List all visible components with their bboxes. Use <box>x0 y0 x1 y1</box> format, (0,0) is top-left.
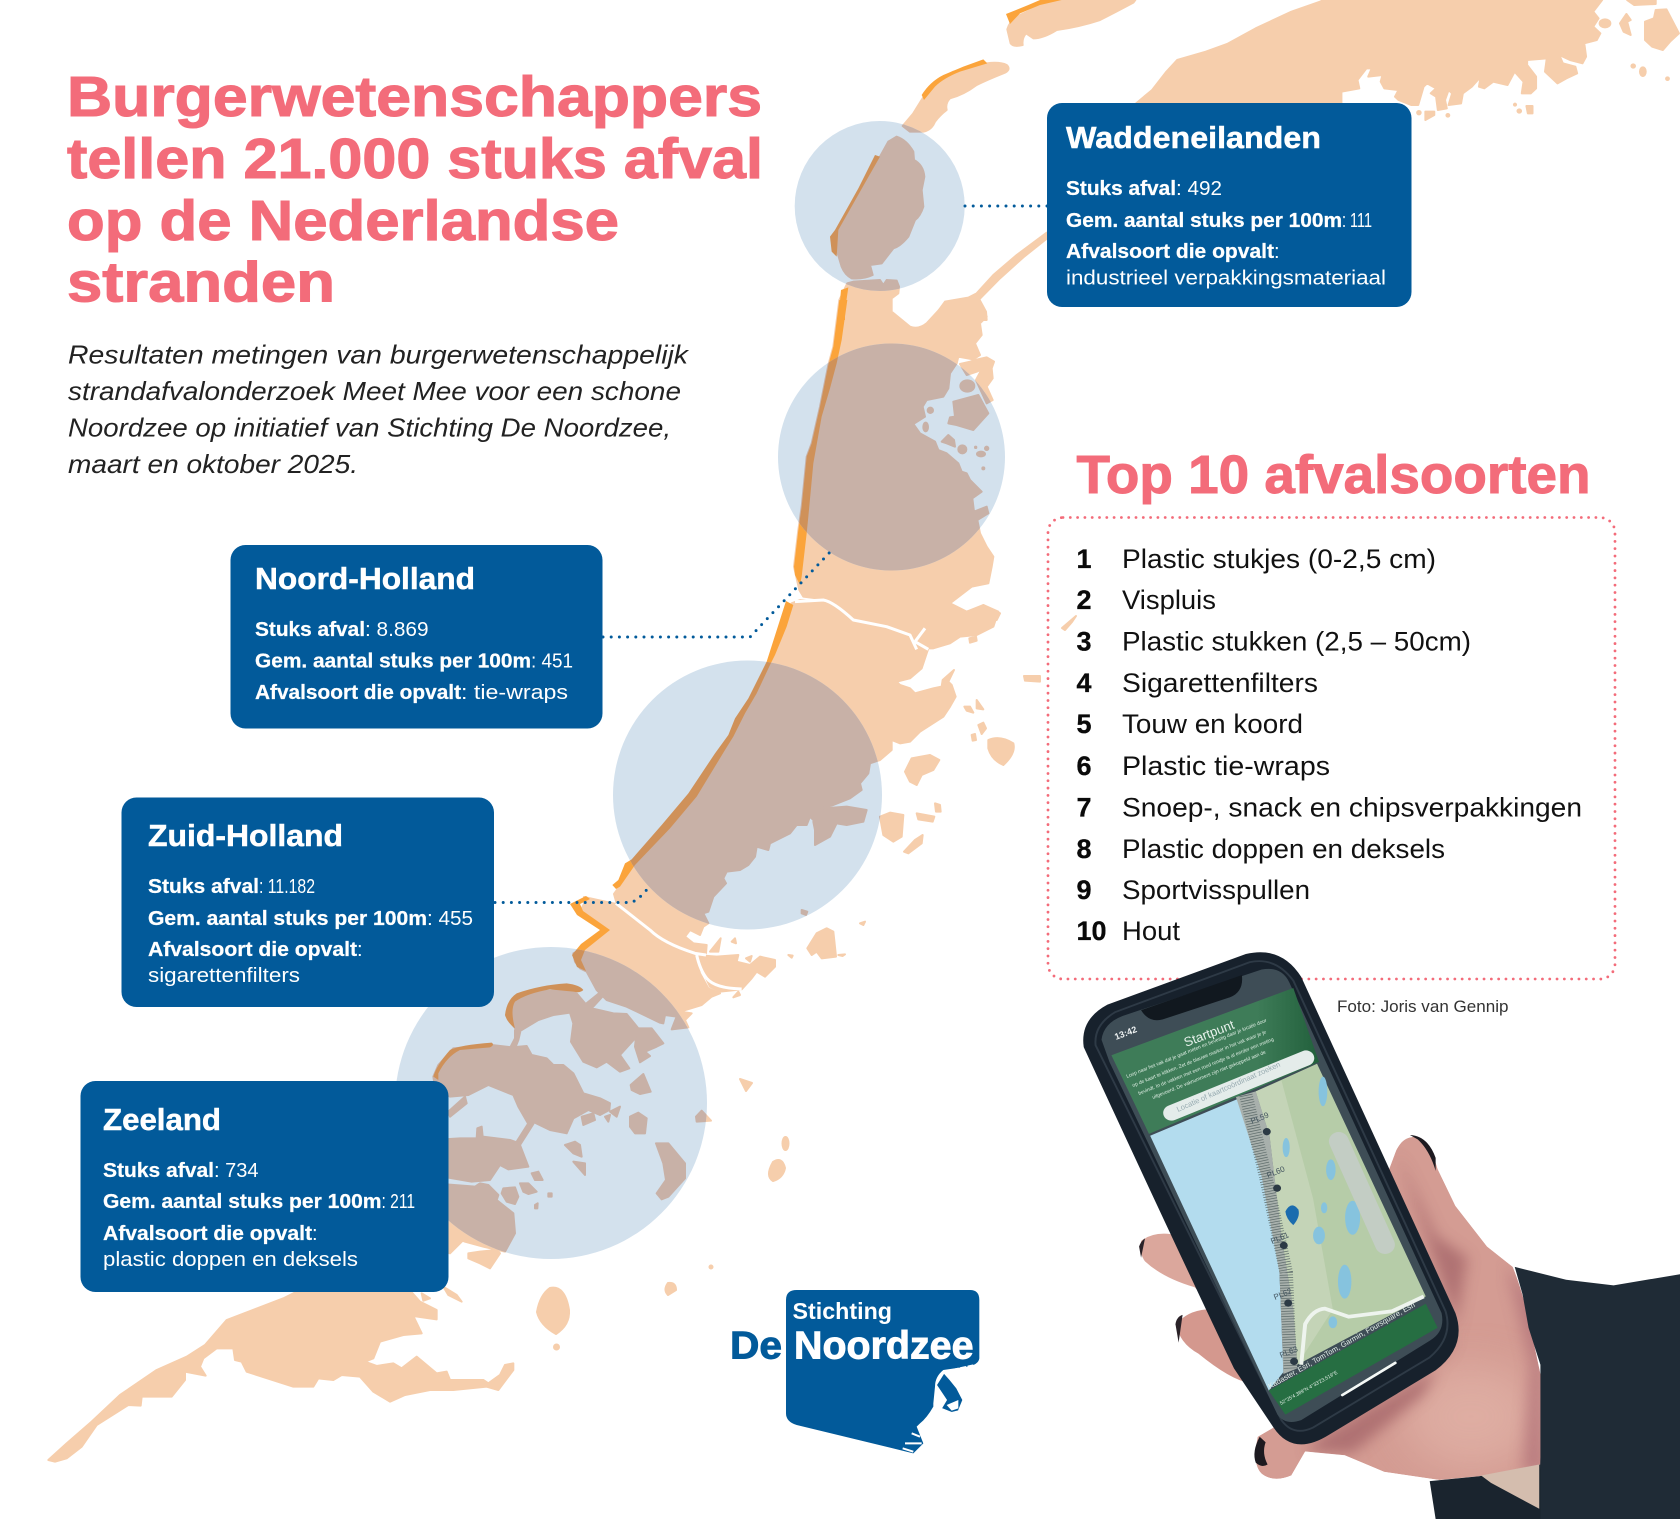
cuff <box>1481 1464 1539 1509</box>
panel: top 10 list: 2 <box>1076 585 1092 615</box>
panel: Zuid-Holland: : <box>357 939 363 961</box>
panel: Waddeneilanden: : 492 <box>1176 178 1222 200</box>
title: stranden <box>67 250 335 314</box>
photo: hand holding phone with app <box>1083 952 1680 1519</box>
title: op de Nederlandse <box>67 189 619 253</box>
dotted connector lines <box>495 206 1047 902</box>
panel: Zeeland <box>80 1081 448 1292</box>
panel: Zuid-Holland <box>122 798 494 1007</box>
panel: Waddeneilanden: Waddeneilanden <box>1066 121 1321 155</box>
beach hatch <box>1236 1091 1297 1374</box>
intro paragraph <box>68 340 690 479</box>
panel: top 10 list: Snoep-, snack en chipsverpakkingen <box>1122 792 1582 822</box>
panel: Waddeneilanden: : 111 <box>1342 210 1372 232</box>
panel: Zuid-Holland: : 455 <box>427 908 473 930</box>
intro paragraph: Noordzee op initiatief van Stichting De Noordzee, <box>68 412 671 442</box>
panel: Zeeland: : 211 <box>382 1191 415 1213</box>
panel: Zeeland: : <box>312 1223 318 1245</box>
intro paragraph: strandafvalonderzoek Meet Mee voor een schone <box>68 376 681 406</box>
map control pill <box>1339 1141 1385 1245</box>
finger 2 <box>1177 1309 1250 1383</box>
panel: top 10 list: 6 <box>1076 751 1092 781</box>
photo: hand holding phone with app: PL59 <box>1249 1110 1271 1126</box>
panel: top 10 list: 10 <box>1076 916 1107 946</box>
inner sleeve <box>1430 1464 1540 1519</box>
road <box>1301 1296 1424 1365</box>
logo shape <box>786 1290 979 1453</box>
photo: hand holding phone with app: uitgevoerd. De vaknummers zijn niet gekoppeld aan de <box>1152 1050 1267 1101</box>
screen <box>1102 969 1442 1422</box>
intro paragraph: Resultaten metingen van burgerwetenschappelijk <box>68 340 690 370</box>
finger 1 <box>1141 1234 1218 1309</box>
panel: top 10 list: 7 <box>1076 792 1092 822</box>
panel: Zeeland: : 734 <box>214 1160 258 1182</box>
beach hatch lines <box>1246 1095 1291 1370</box>
panel: Waddeneilanden: Afvalsoort die opvalt <box>1066 241 1274 263</box>
highlight circles for the four regions <box>395 121 1005 1259</box>
logo mini-map lake <box>947 1400 958 1411</box>
panel: Zeeland: Stuks afval <box>103 1160 214 1182</box>
panel: Zuid-Holland: Stuks afval <box>148 876 259 898</box>
panel: Zeeland: Zeeland <box>103 1103 221 1137</box>
panel: Noord-Holland: : 451 <box>531 650 573 672</box>
photo: hand holding phone with app: PL63 <box>1278 1344 1300 1360</box>
title: tellen 21.000 stuks afval <box>67 127 763 191</box>
panel: top 10 list: Plastic tie-wraps <box>1122 751 1330 781</box>
map: orange survey coastline <box>433 0 1062 1080</box>
title <box>67 65 763 314</box>
panel: Noord-Holland: Stuks afval <box>255 619 365 641</box>
panel: Noord-Holland: Afvalsoort die opvalt <box>255 682 461 704</box>
photo: hand holding phone with app: Kadaster, Esri, TomTom, Garmin, Foursquare, Esri <box>1267 1300 1417 1391</box>
panel: top 10 list: Sportvisspullen <box>1122 875 1310 905</box>
panel: top 10 list: Touw en koord <box>1122 709 1303 739</box>
heading: Top 10 afvalsoorten: Top 10 afvalsoorten <box>1076 445 1590 505</box>
panel: Noord-Holland: : tie-wraps <box>461 682 568 704</box>
logo: Stichting De Noordzee: Noordzee <box>794 1324 974 1368</box>
panel: Zuid-Holland: sigarettenfilters <box>148 965 300 987</box>
panel: Waddeneilanden: Gem. aantal stuks per 100m <box>1066 210 1342 232</box>
panel: Noord-Holland: : 8.869 <box>365 619 428 641</box>
panel: Zuid-Holland: Zuid-Holland <box>148 819 343 853</box>
bottom bar <box>1269 1304 1438 1415</box>
inland map <box>1256 1064 1426 1365</box>
photo: hand holding phone with app: op de kaart te klikken. Zet de blauwe marker in het vak waar je je <box>1132 1029 1267 1089</box>
phone case <box>1083 952 1459 1444</box>
nails <box>1410 1135 1436 1171</box>
photo: hand holding phone with app: 13:42 <box>1113 1024 1138 1042</box>
inland lighter dune band <box>1256 1080 1333 1365</box>
header <box>1111 988 1319 1134</box>
logo mini-map delta <box>903 1433 922 1452</box>
title: Burgerwetenschappers <box>67 65 762 129</box>
photo: hand holding phone with app: bevindt. In de vakken met een rood rondje is al eerder een meting <box>1138 1037 1275 1097</box>
panel: top 10 list: Hout <box>1122 916 1180 946</box>
panel: top 10 list: Vispluis <box>1122 585 1216 615</box>
sea <box>1150 1099 1283 1391</box>
sleeve <box>1515 1267 1680 1519</box>
panel: Zuid-Holland: Gem. aantal stuks per 100m <box>148 908 427 930</box>
photo: hand holding phone with app: PL60 <box>1265 1164 1287 1180</box>
search pill <box>1172 1058 1306 1113</box>
panel: top 10 list: Plastic stukken (2,5 – 50cm) <box>1122 626 1471 656</box>
panel: Noord-Holland: Gem. aantal stuks per 100m <box>255 650 531 672</box>
panel: top 10 list: 1 <box>1076 544 1092 574</box>
ponds <box>1283 1077 1360 1328</box>
map: coastline inside the circles <box>433 0 1062 1080</box>
logo mini-map <box>937 1373 963 1412</box>
panel: Zuid-Holland: Afvalsoort die opvalt <box>148 939 357 961</box>
phone bumper highlight <box>1095 961 1448 1431</box>
panel: top 10 list: Plastic doppen en deksels <box>1122 834 1445 864</box>
hand <box>1255 1137 1544 1480</box>
panel: top 10 list: Sigarettenfilters <box>1122 668 1318 698</box>
photo credit: Foto: Joris van Gennip <box>1337 998 1508 1016</box>
photo: hand holding phone with app: Loop naar het vak dat je gaat meten en bevestig daar je locatie door <box>1126 1018 1268 1080</box>
logo mini-map islands <box>937 1365 973 1383</box>
panel: top 10 list: 3 <box>1076 626 1092 656</box>
panel: top 10 list: 8 <box>1076 834 1092 864</box>
map: canal channels <box>616 600 928 989</box>
panel: top 10 list: 5 <box>1076 709 1092 739</box>
panel: Zeeland: plastic doppen en deksels <box>103 1249 358 1271</box>
panel: top 10 list: Plastic stukjes (0-2,5 cm) <box>1122 544 1436 574</box>
photo: hand holding phone with app: Locatie of kaartcoördinaat zoeken <box>1175 1060 1282 1114</box>
intro paragraph: maart en oktober 2025. <box>68 449 358 479</box>
photo: hand holding phone with app: PL61 <box>1269 1230 1291 1246</box>
panel: Waddeneilanden: Stuks afval <box>1066 178 1176 200</box>
panel: Waddeneilanden: industrieel verpakkingsmateriaal <box>1066 268 1386 290</box>
panel: Noord-Holland <box>230 545 602 728</box>
panel: Noord-Holland: Noord-Holland <box>255 562 475 596</box>
panel: Waddeneilanden <box>1047 103 1412 307</box>
panel: Zeeland: Gem. aantal stuks per 100m <box>103 1191 382 1213</box>
notch <box>1141 975 1242 1020</box>
location marker <box>1285 1205 1299 1225</box>
screen texts: Startpunt <box>1182 1017 1237 1050</box>
survey points <box>1263 1128 1298 1365</box>
panel: top 10 list: 4 <box>1076 668 1092 698</box>
logo: Stichting De Noordzee: De <box>730 1324 782 1368</box>
panel: Zuid-Holland: : 11.182 <box>259 876 315 898</box>
panel: Waddeneilanden: : <box>1274 241 1280 263</box>
panel: top 10 list <box>1048 518 1615 979</box>
photo: hand holding phone with app: 52°25'4.389"N 4°33'23.519"E <box>1279 1370 1339 1407</box>
photo: hand holding phone with app: PL62 <box>1272 1286 1294 1302</box>
logo: Stichting De Noordzee: Stichting <box>792 1298 892 1324</box>
home bar <box>1342 1363 1395 1395</box>
panel: top 10 list: 9 <box>1076 875 1092 905</box>
panel: Zeeland: Afvalsoort die opvalt <box>103 1223 312 1245</box>
logo: Stichting De Noordzee <box>730 1290 979 1453</box>
